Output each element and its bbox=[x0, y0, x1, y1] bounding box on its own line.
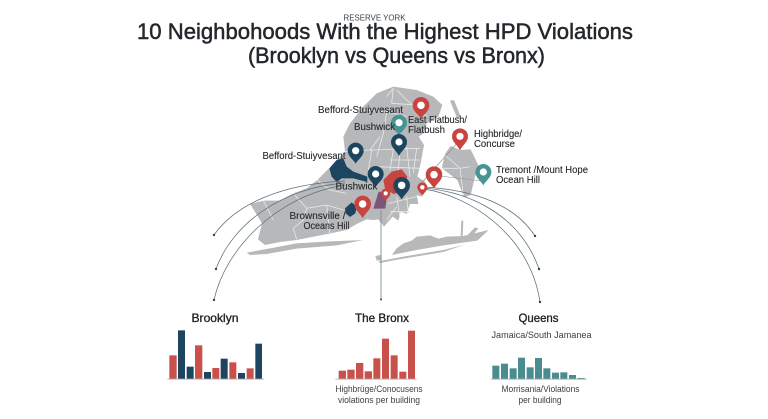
panel: Queens bbox=[491, 311, 592, 405]
connector line: centre bbox=[380, 210, 382, 300]
heading: Queens: Queens bbox=[518, 311, 558, 325]
label: Tremont bbox=[496, 165, 588, 186]
pin: red small centre bbox=[381, 189, 390, 201]
label: Brownsville: Brownsville / bbox=[290, 211, 346, 222]
pin: red centre right bbox=[426, 166, 442, 188]
caption: The Bronx: violations per building bbox=[338, 395, 420, 405]
label: Brownsville bbox=[290, 211, 350, 232]
land: main bbox=[250, 87, 442, 245]
highlighted district: red bbox=[383, 169, 407, 194]
highlighted district: purple bbox=[373, 192, 387, 209]
caption: Queens: Morrisania/Violations bbox=[502, 384, 580, 394]
pin: red small right bbox=[417, 182, 427, 196]
heading: The Bronx: The Bronx bbox=[355, 311, 409, 325]
road network bbox=[263, 88, 470, 239]
panel: Brooklyn bbox=[167, 311, 264, 380]
label: East Flatbush: Flatbush bbox=[408, 125, 445, 136]
eyebrow: RESERVE YORK bbox=[344, 12, 406, 22]
bar chart: The Bronx bbox=[335, 331, 417, 380]
pin: navy centre bbox=[393, 177, 410, 199]
pin: navy west bbox=[348, 143, 364, 163]
label: Tremont: Ocean Hill bbox=[496, 175, 540, 186]
connector arcs: left bbox=[213, 181, 345, 301]
label: Tremont: Tremont /Mount Hope bbox=[496, 165, 588, 176]
pin: navy north bbox=[391, 134, 407, 156]
panel: The Bronx bbox=[335, 311, 423, 405]
caption: The Bronx: Highbrüge/Conocusens bbox=[336, 384, 423, 394]
pin: teal east bbox=[475, 164, 491, 185]
pin: navy centre left bbox=[368, 166, 384, 187]
pin: red east bbox=[452, 128, 468, 150]
label: Highbridge: Concurse bbox=[474, 139, 515, 150]
connector lines: pins bbox=[417, 140, 482, 188]
label: Befford-Stuiyvesant lower: Befford-Stuiyvesant bbox=[262, 151, 346, 162]
pin: red north bbox=[413, 97, 429, 118]
bar chart: Brooklyn bbox=[167, 330, 264, 380]
label: Highbridge bbox=[474, 129, 522, 150]
land: barrier strips bbox=[247, 100, 489, 263]
land: east island bbox=[442, 146, 479, 197]
label: Bushwick lower: Bushwick bbox=[336, 182, 378, 192]
label: Highbridge: Highbridge/ bbox=[474, 129, 522, 140]
map pins bbox=[348, 97, 491, 218]
title bbox=[137, 19, 633, 68]
label: East Flatbush: East Flatbush/ bbox=[408, 115, 467, 126]
label: East Flatbush bbox=[408, 115, 467, 136]
label: Bushwick upper: Bushwick bbox=[354, 122, 396, 133]
title: (Brooklyn vs Queens vs Bronx) bbox=[248, 43, 545, 68]
title: 10 Neighbohoods With the Highest HPD Violations bbox=[137, 19, 633, 44]
highlighted district: navy south bbox=[345, 202, 357, 217]
pin: teal north bbox=[391, 115, 407, 135]
caption: The Bronx bbox=[336, 384, 423, 405]
highlighted district: navy north bbox=[329, 158, 367, 182]
label: Befford-Stuiyvesant upper: Befford-Stuiyvesant bbox=[318, 105, 403, 116]
pin: red south bbox=[354, 196, 371, 218]
heading: Brooklyn: Brooklyn bbox=[192, 311, 238, 325]
subheading: Jamaica: Jamaica/South Jamanea bbox=[492, 330, 592, 340]
connector arcs: right bbox=[424, 187, 541, 303]
label: Brownsville: Oceans Hill bbox=[304, 221, 350, 232]
bar chart: Queens bbox=[491, 358, 587, 380]
map of neighborhoods bbox=[247, 87, 489, 263]
caption: Queens: per building bbox=[518, 395, 562, 405]
caption: Queens bbox=[502, 384, 580, 405]
